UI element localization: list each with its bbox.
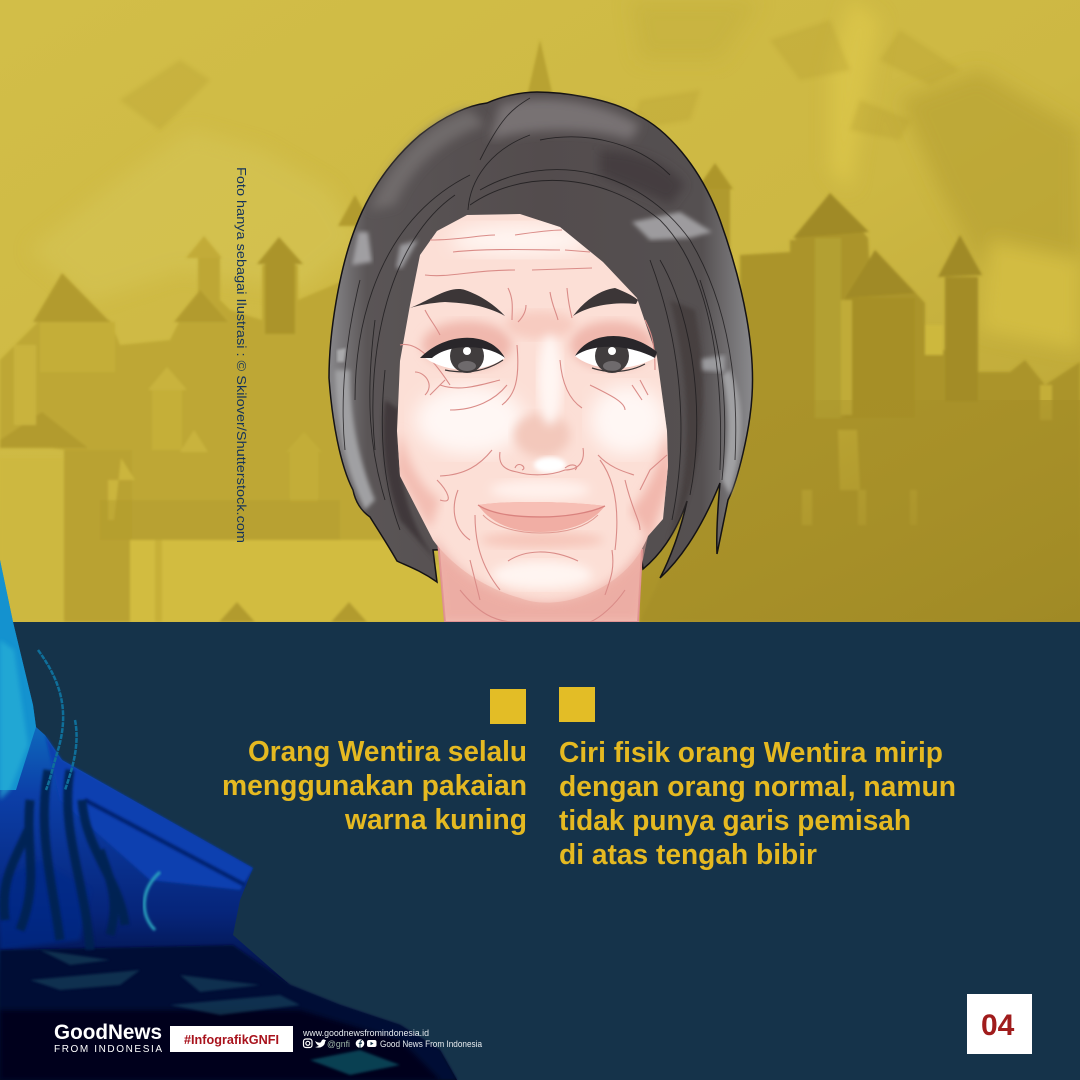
seaweed	[4, 770, 125, 950]
face skin	[397, 214, 668, 603]
left castle	[0, 236, 450, 622]
photo credit: Foto hanya sebagai Ilustrasi : © Skilover/Shutterstock.com	[234, 167, 249, 543]
icon: twitter	[315, 1039, 326, 1048]
social media links	[302, 1028, 483, 1050]
page number: 04	[981, 1009, 1015, 1042]
wrinkles	[400, 230, 667, 622]
panel: castle background	[0, 0, 1080, 622]
icon: instagram	[304, 1039, 312, 1048]
icon: youtube	[367, 1040, 376, 1047]
social media links: www.goodnewsfromindonesia.id	[302, 1028, 429, 1039]
hair back	[329, 92, 753, 582]
mouth	[478, 502, 605, 533]
decorative underwater corner illustration	[0, 560, 457, 1080]
icon: left yellow square	[490, 689, 526, 724]
hashtag badge: #InfografikGNFI	[184, 1032, 279, 1047]
text: right statement	[559, 737, 956, 871]
page number	[967, 994, 1032, 1054]
text: right statement: Ciri fisik orang Wentira mirip	[559, 737, 943, 769]
icon: facebook	[356, 1039, 364, 1048]
logo: GoodNews From Indonesia: FROM INDONESIA	[54, 1044, 162, 1055]
text: right statement: tidak punya garis pemisah	[559, 805, 911, 837]
central towers behind head	[338, 42, 733, 593]
illustration: elderly woman portrait	[329, 92, 753, 622]
right eye	[575, 336, 657, 373]
text: left statement: menggunakan pakaian	[222, 770, 527, 802]
text: left statement: warna kuning	[344, 804, 527, 836]
text: left statement	[222, 736, 527, 836]
social media links: @gnfi	[327, 1039, 350, 1050]
text: left statement: Orang Wentira selalu	[248, 736, 527, 768]
logo: GoodNews From Indonesia	[54, 1021, 162, 1055]
icon: right yellow square	[559, 687, 595, 722]
panel: dark navy lower section	[0, 622, 1080, 1080]
left eye	[420, 338, 505, 373]
hair strands	[343, 98, 736, 530]
hashtag badge	[170, 1026, 293, 1052]
text: right statement: di atas tengah bibir	[559, 839, 817, 871]
social media links: Good News From Indonesia	[380, 1039, 483, 1050]
logo: GoodNews From Indonesia: GoodNews	[54, 1021, 162, 1044]
eyebrows	[410, 288, 638, 316]
text: right statement: dengan orang normal, namun	[559, 771, 956, 803]
right castle	[739, 192, 1080, 573]
face shading	[395, 224, 672, 622]
neck	[438, 540, 642, 622]
hair highlights	[335, 99, 741, 565]
